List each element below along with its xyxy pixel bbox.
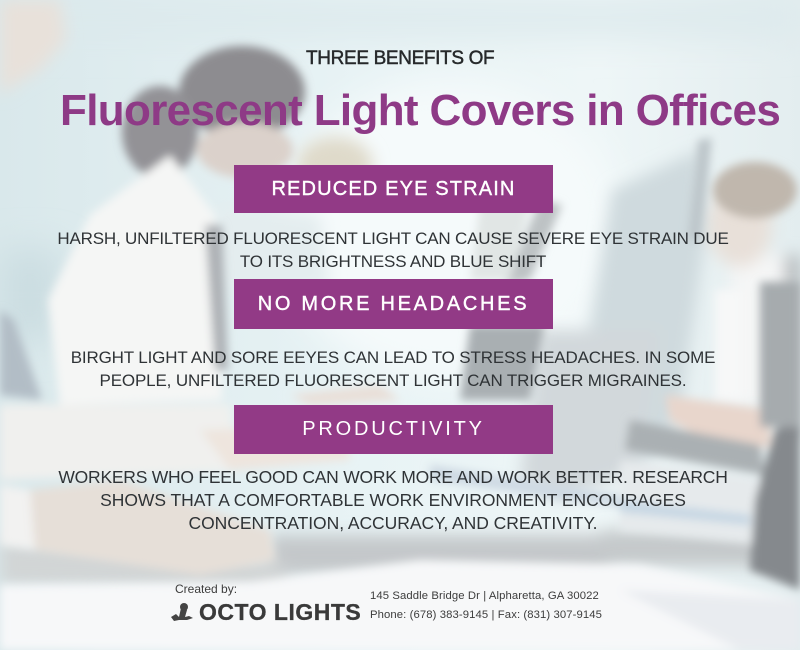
eyebrow heading: THREE BENEFITS OF — [306, 48, 494, 69]
footer credit label: Created by: — [175, 582, 237, 596]
footer contact details — [370, 590, 602, 621]
section 2 heading — [234, 279, 553, 329]
section 1 text: HARSH, UNFILTERED FLUORESCENT LIGHT CAN CAUSE SEVERE EYE STRAIN DUE — [57, 229, 729, 248]
section 2 text: BIRGHT LIGHT AND SORE EEYES CAN LEAD TO STRESS HEADACHES. IN SOME — [71, 348, 715, 367]
section 3 text: SHOWS THAT A COMFORTABLE WORK ENVIRONMENT ENCOURAGES — [100, 490, 686, 510]
section 1 text — [57, 229, 729, 271]
footer logo — [171, 599, 361, 625]
woman hair — [179, 46, 305, 138]
section 2 text: PEOPLE, UNFILTERED FLUORESCENT LIGHT CAN TRIGGER MIGRAINES. — [100, 371, 686, 390]
main title: Fluorescent Light Covers in Offices — [60, 86, 780, 135]
section 2 heading: NO MORE HEADACHES — [258, 293, 529, 315]
section 3 heading — [234, 405, 553, 454]
section 1 heading — [234, 165, 553, 213]
icon: octopus — [171, 603, 193, 621]
section 3 heading: PRODUCTIVITY — [302, 418, 485, 440]
section 1 text: TO ITS BRIGHTNESS AND BLUE SHIFT — [240, 252, 546, 271]
section 2 text — [71, 348, 715, 390]
section 1 heading: REDUCED EYE STRAIN — [271, 178, 516, 200]
footer contact details: Phone: (678) 383-9145 | Fax: (831) 307-9145 — [370, 609, 602, 621]
logo wordmark: OCTO LIGHTS — [199, 599, 361, 625]
footer contact details: 145 Saddle Bridge Dr | Alpharetta, GA 30022 — [370, 590, 599, 602]
woman's shirt — [48, 155, 222, 405]
section 3 text: CONCENTRATION, ACCURACY, AND CREATIVITY. — [188, 513, 598, 533]
section 3 text: WORKERS WHO FEEL GOOD CAN WORK MORE AND WORK BETTER. RESEARCH — [58, 467, 728, 487]
section 3 text — [58, 467, 728, 533]
